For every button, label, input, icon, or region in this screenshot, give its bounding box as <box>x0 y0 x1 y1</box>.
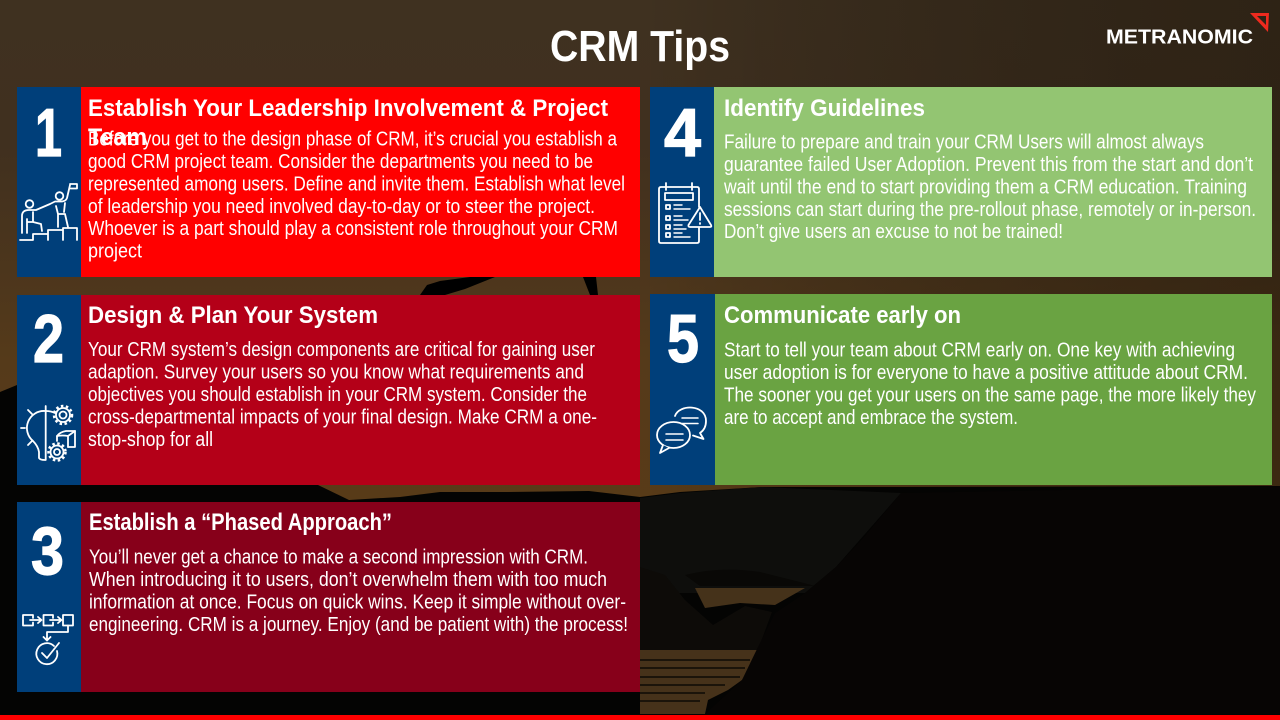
body tip 3 <box>89 546 628 636</box>
number 2: 2 <box>33 301 64 377</box>
heading tip 4: Identify Guidelines <box>724 95 925 122</box>
icon: team climbing stairs with flag <box>20 184 77 240</box>
body tip 2: stop-shop for all <box>88 429 213 451</box>
icon: process flow with check <box>23 615 73 664</box>
number 5: 5 <box>667 301 699 377</box>
body tip 3: When introducing it to users, don’t overwhelm them with too much <box>89 569 607 591</box>
body tip 1: Whoever is a part should play a consistent role throughout your CRM <box>88 218 618 240</box>
number 4: 4 <box>664 95 701 171</box>
heading tip 2: Design & Plan Your System <box>88 302 378 329</box>
title: CRM Tips <box>550 22 730 71</box>
body tip 1: represented among users. Define and invite them. Establish what level <box>88 174 625 196</box>
panel: tip 3 <box>17 502 640 692</box>
panel: tip 2 <box>17 295 640 485</box>
body tip 3: engineering. CRM is a journey. Enjoy (and be patient with) the process! <box>89 614 628 636</box>
logo: Metranomic <box>1106 13 1269 48</box>
body tip 1: Before you get to the design phase of CRM, it’s crucial you establish a <box>88 128 618 150</box>
body tip 4 <box>723 132 1256 243</box>
heading tip 5: Communicate early on <box>724 302 961 329</box>
body tip 4: Failure to prepare and train your CRM Users will almost always <box>724 132 1204 154</box>
body tip 2: Your CRM system’s design components are critical for gaining user <box>88 339 595 361</box>
bottom accent bar <box>0 715 1280 720</box>
panel: tip 4 <box>650 87 1272 277</box>
heading tip 1 second line: Team <box>88 124 147 151</box>
panel: tip 1 <box>17 87 640 277</box>
body tip 3: You’ll never get a chance to make a second impression with CRM. <box>89 546 588 568</box>
body tip 1 <box>88 128 625 262</box>
icon: checklist with warning triangle <box>659 183 711 243</box>
icon: light bulb with gears <box>21 406 75 460</box>
body tip 2 <box>88 339 597 451</box>
body tip 1: good CRM project team. Consider the departments you need to be <box>88 151 593 173</box>
heading tip 3: Establish a “Phased Approach” <box>89 509 392 536</box>
body tip 2: cross-departmental impacts of your final design. Make CRM a one- <box>88 406 597 428</box>
icon: two chat bubbles <box>657 408 706 453</box>
number 3: 3 <box>31 513 64 589</box>
heading tip 1: Establish Your Leadership Involvement & Project <box>88 95 608 122</box>
logo: Metranomic: METRANOMIC <box>1106 26 1253 48</box>
panel: tip 5 <box>650 294 1272 485</box>
body tip 2: objectives you should establish in your CRM system. Consider the <box>88 384 587 406</box>
body tip 2: adaption. Survey your users so you know what requirements and <box>88 362 584 384</box>
body tip 1: of leadership you need involved day-to-day or to steer the project. <box>88 196 595 218</box>
body tip 5: are to accept and embrace the system. <box>724 407 1018 429</box>
number 1: 1 <box>35 95 62 171</box>
body tip 1: project <box>88 240 142 262</box>
body tip 3: information at once. Focus on quick wins. Keep it simple without over- <box>89 592 626 614</box>
body tip 4: Don’t give users an excuse to not be trained! <box>724 221 1063 243</box>
body tip 5 <box>724 340 1256 429</box>
